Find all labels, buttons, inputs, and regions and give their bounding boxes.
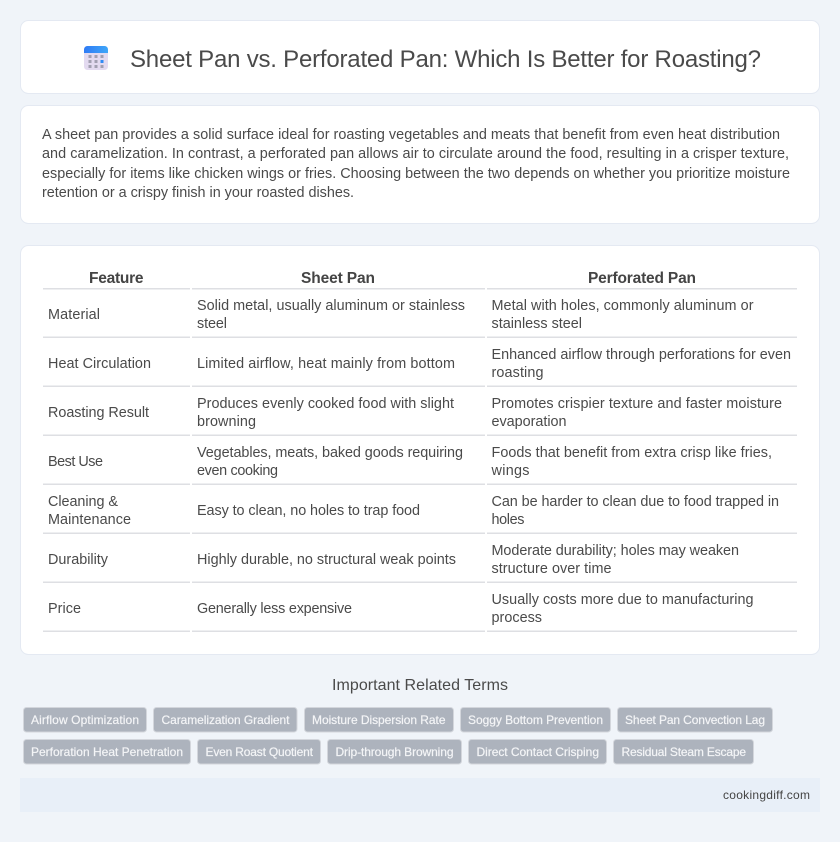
tags: related terms: Even Roast Quotient [206, 745, 314, 759]
tags: related terms: Airflow Optimization [31, 713, 139, 727]
row: price: Usually costs more due to manufacturing [492, 592, 754, 608]
row: best use: even cooking [197, 463, 278, 479]
row: durability: Durability [48, 552, 109, 568]
tags: related terms [24, 708, 772, 764]
panel: introduction [20, 106, 820, 224]
row: roasting result [48, 396, 782, 430]
footer [20, 778, 820, 812]
row: best use: wings [490, 463, 530, 479]
icon: calendar [84, 46, 108, 70]
footer: cookingdiff.com [723, 788, 810, 802]
row: durability [48, 543, 739, 577]
row: heat circulation: Limited airflow, heat mainly from bottom [197, 356, 455, 372]
row: best use: Best Use [48, 454, 103, 470]
row: roasting result: Promotes crispier texture and faster moisture [492, 396, 782, 412]
row: heat circulation: Heat Circulation [48, 356, 151, 372]
panel: header [20, 20, 820, 94]
row: cleaning and maintenance: holes [492, 512, 524, 528]
row: cleaning and maintenance: Maintenance [48, 512, 131, 528]
row: roasting result: browning [197, 414, 256, 430]
text block: introduction paragraph: especially for items like chicken wings or fries. Choosing between the two depends on whether you prioritize moisture [42, 166, 790, 182]
row: heat circulation: roasting [492, 365, 544, 381]
row: price: Generally less expensive [197, 601, 352, 617]
row: cleaning and maintenance: Easy to clean, no holes to trap food [197, 503, 420, 519]
row: best use [48, 445, 772, 479]
row: price: process [492, 610, 542, 626]
row: durability: structure over time [492, 561, 612, 577]
table header row: Feature [89, 270, 144, 287]
tags: related terms: Moisture Dispersion Rate [312, 713, 446, 727]
tags: related terms: Soggy Bottom Prevention [468, 713, 603, 727]
text block: introduction paragraph: retention or a crispy finish in your roasted dishes. [42, 185, 354, 201]
table header row: Sheet Pan [301, 270, 375, 287]
tags: related terms: Residual Steam Escape [622, 745, 746, 759]
row: heat circulation: Enhanced airflow through perforations for even [492, 347, 791, 363]
text block: introduction paragraph: A sheet pan provides a solid surface ideal for roasting vegetables and meats that benefit from even heat distribution [42, 127, 780, 143]
row: roasting result: Roasting Result [48, 405, 149, 421]
table header row: Perforated Pan [588, 270, 696, 287]
tags: related terms: Direct Contact Crisping [476, 745, 599, 759]
row: price: Price [48, 601, 81, 617]
text block: introduction paragraph: and caramelization. In contrast, a perforated pan allows air to circulate around the food, resulting in a crisper texture, [42, 146, 789, 162]
table header row [89, 270, 696, 287]
row: durability: Moderate durability; holes may weaken [492, 543, 739, 559]
text block: introduction paragraph [42, 127, 790, 201]
tags: related terms: Drip-through Browning [336, 745, 454, 759]
panel: comparison table [20, 246, 820, 654]
row: best use: Foods that benefit from extra crisp like fries, [492, 445, 772, 461]
row: best use: Vegetables, meats, baked goods requiring [197, 445, 463, 461]
row: material: Material [48, 307, 100, 323]
row: material: stainless steel [492, 316, 582, 332]
row: heat circulation [48, 347, 791, 381]
title: Sheet Pan vs. Perforated Pan: Which Is Better for Roasting? [130, 46, 761, 73]
row: roasting result: Produces evenly cooked food with slight [197, 396, 454, 412]
row: material: Metal with holes, commonly aluminum or [492, 298, 754, 314]
row: material: steel [197, 316, 227, 332]
row: durability: Highly durable, no structural weak points [197, 552, 456, 568]
row: material: Solid metal, usually aluminum or stainless [197, 298, 465, 314]
row: material [48, 298, 754, 332]
row: price [48, 592, 754, 626]
tags: related terms: Caramelization Gradient [162, 713, 290, 727]
tags: related terms: Perforation Heat Penetration [31, 745, 183, 759]
tags: related terms: Sheet Pan Convection Lag [625, 713, 765, 727]
row: cleaning and maintenance: Cleaning & [48, 494, 118, 510]
row: cleaning and maintenance [48, 494, 779, 528]
row: roasting result: evaporation [492, 414, 566, 430]
heading: related terms: Important Related Terms [332, 677, 508, 694]
row: cleaning and maintenance: Can be harder to clean due to food trapped in [492, 494, 779, 510]
